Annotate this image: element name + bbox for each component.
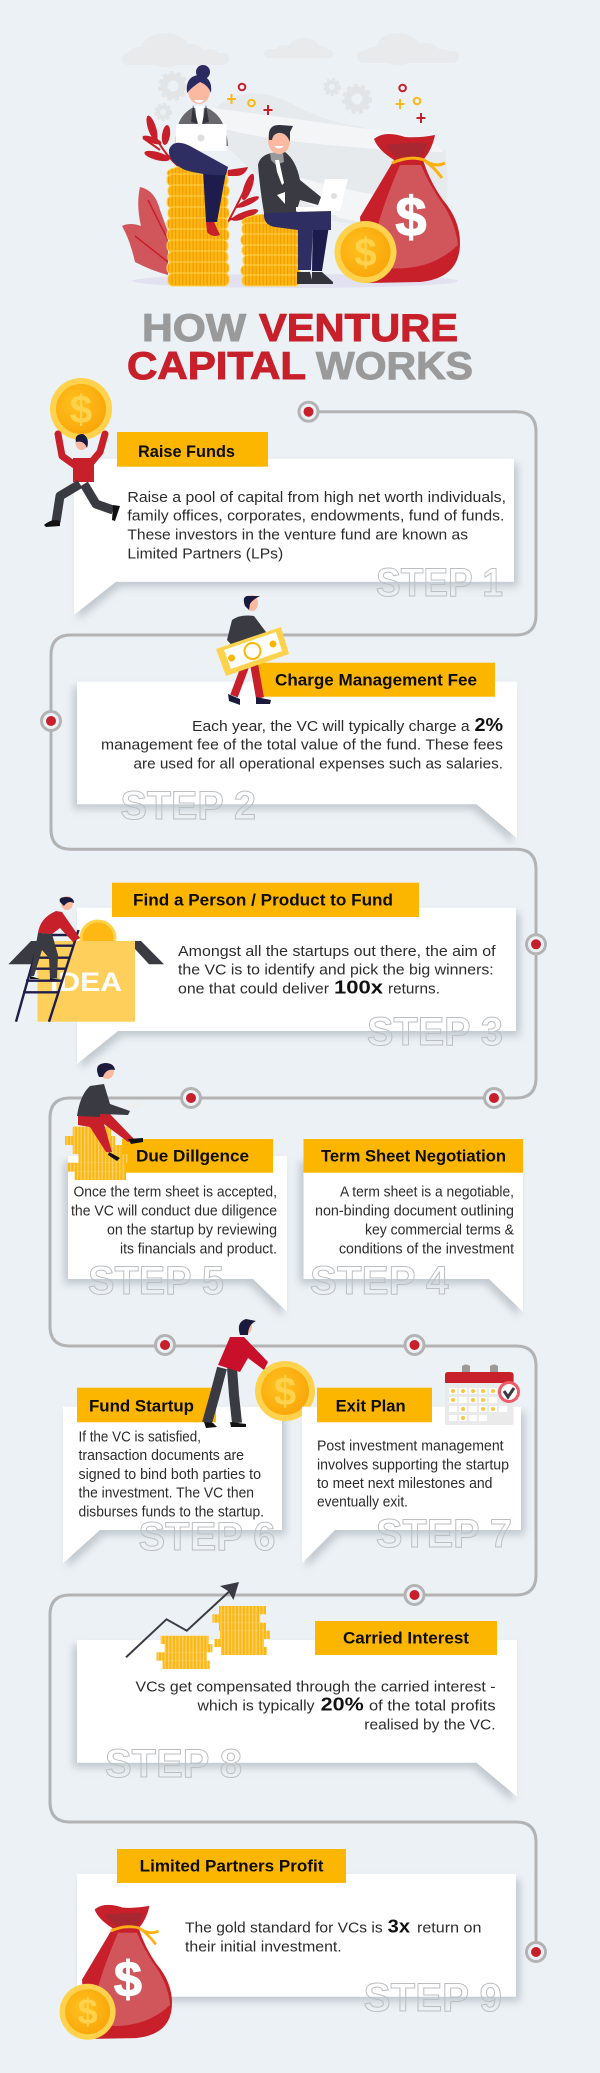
person lifting coin xyxy=(44,378,120,527)
body text: one that could deliver xyxy=(178,982,329,998)
ground shadow xyxy=(132,274,458,288)
body text: Once the term sheet is accepted, xyxy=(74,1185,277,1201)
body text: 100x xyxy=(334,978,383,998)
panel: step 1 xyxy=(44,378,514,615)
body text: their initial investment. xyxy=(185,1939,342,1955)
body text: the VC will conduct due diligence xyxy=(71,1204,277,1220)
node 7 xyxy=(405,1336,424,1354)
panel: step 7 xyxy=(302,1364,521,1563)
node 1 xyxy=(299,402,318,421)
body text: which is typically xyxy=(196,1698,315,1714)
body text xyxy=(127,490,506,563)
body text: Raise a pool of capital from high net worth individuals, xyxy=(127,490,506,506)
panel: step 3 xyxy=(8,883,516,1064)
background swoosh xyxy=(205,93,448,240)
heading: Carried Interest xyxy=(343,1628,469,1647)
speech box xyxy=(77,908,516,1064)
growth arrow xyxy=(126,1582,239,1657)
heading xyxy=(317,1388,432,1422)
node 5 xyxy=(182,1088,200,1108)
title: CAPITAL xyxy=(127,345,306,388)
title xyxy=(127,307,473,388)
step label: STEP 9 xyxy=(364,1976,502,2020)
heading: Charge Management Fee xyxy=(275,670,477,689)
node 2 xyxy=(42,712,60,730)
gears xyxy=(156,73,370,120)
clouds xyxy=(122,33,459,67)
body text: If the VC is satisfied, xyxy=(78,1429,201,1445)
body text xyxy=(185,1916,481,1955)
coin xyxy=(334,221,396,283)
panel: step 6 xyxy=(63,1319,315,1563)
person pushing coin xyxy=(204,1319,315,1428)
body text: VCs get compensated through the carried interest - xyxy=(136,1679,496,1695)
body text: key commercial terms & xyxy=(365,1223,514,1239)
coin: $ xyxy=(354,231,377,275)
step label: STEP 4 xyxy=(310,1259,449,1303)
heading xyxy=(315,1621,497,1655)
speech box xyxy=(77,1874,516,1997)
body text xyxy=(71,1185,277,1257)
heading: Exit Plan xyxy=(336,1397,406,1416)
body text xyxy=(315,1185,514,1257)
money bag: $ xyxy=(395,185,427,248)
icon: calendar xyxy=(445,1364,518,1425)
node 4 xyxy=(484,1088,504,1108)
step label: STEP 3 xyxy=(367,1010,503,1054)
icon: money bag with coin: $ xyxy=(114,1951,142,2008)
body text: family offices, corporates, endowments, fund of funds. xyxy=(127,509,504,525)
body text: conditions of the investment xyxy=(339,1241,514,1257)
body text: on the startup by reviewing xyxy=(107,1223,277,1239)
node 6 xyxy=(156,1336,174,1354)
body text: signed to bind both parties to xyxy=(78,1467,261,1483)
body text xyxy=(136,1679,496,1733)
body text: Amongst all the startups out there, the aim of xyxy=(178,944,497,960)
title: HOW xyxy=(142,307,246,350)
panel: step 9 xyxy=(60,1849,516,2040)
heading: Fund Startup xyxy=(89,1397,194,1416)
body text: 2% xyxy=(474,715,503,735)
person carrying banknote xyxy=(216,595,289,705)
money bag xyxy=(360,134,460,283)
speech box xyxy=(304,1156,523,1312)
step label: STEP 1 xyxy=(376,561,503,605)
icon: money bag with coin: $ xyxy=(78,1991,98,2032)
body text: Post investment management xyxy=(317,1438,504,1454)
body text: Limited Partners (LPs) xyxy=(127,547,283,563)
panel: step 5 xyxy=(65,1063,287,1312)
body text: involves supporting the startup xyxy=(317,1457,509,1473)
step label: STEP 2 xyxy=(120,784,256,828)
heading: Term Sheet Negotiation xyxy=(321,1147,506,1166)
heading xyxy=(112,883,419,917)
body text: A term sheet is a negotiable, xyxy=(340,1185,514,1201)
body text xyxy=(78,1429,264,1521)
speech box xyxy=(77,682,517,838)
speech box xyxy=(74,459,514,615)
body text: 20% xyxy=(321,1694,364,1714)
coin stack left xyxy=(167,165,229,286)
heading: Limited Partners Profit xyxy=(140,1857,324,1876)
body text xyxy=(101,715,503,772)
person pushing coin: $ xyxy=(274,1370,296,1414)
body text: These investors in the venture fund are known as xyxy=(127,528,468,544)
node 3 xyxy=(526,935,546,954)
idea box with ladder: IDEA xyxy=(50,967,122,997)
coin stack right xyxy=(241,214,300,286)
coin stacks xyxy=(156,1606,270,1669)
heading: Raise Funds xyxy=(138,442,235,461)
body text xyxy=(178,944,497,998)
body text: returns. xyxy=(388,982,440,998)
speech box xyxy=(77,1640,517,1797)
body text: of the total profits xyxy=(369,1698,496,1714)
body text: to meet next milestones and xyxy=(317,1476,492,1492)
sparkles xyxy=(227,84,426,123)
woman xyxy=(169,65,248,236)
step label: STEP 8 xyxy=(105,1742,242,1786)
body text: realised by the VC. xyxy=(364,1717,496,1733)
speech box xyxy=(68,1156,287,1312)
body text: Each year, the VC will typically charge a xyxy=(192,719,471,735)
body text: are used for all operational expenses such as salaries. xyxy=(134,756,503,772)
panel: step 2 xyxy=(77,595,517,838)
heading: Due Dillgence xyxy=(136,1147,249,1166)
heading xyxy=(77,1388,216,1422)
step label: STEP 5 xyxy=(88,1259,224,1303)
icon: money bag with coin xyxy=(60,1905,172,2040)
heading xyxy=(122,1139,273,1173)
step label: STEP 6 xyxy=(138,1515,276,1559)
heading xyxy=(117,1849,346,1883)
node 8 xyxy=(405,1586,424,1604)
man xyxy=(258,125,348,284)
person sitting on coins xyxy=(65,1063,143,1180)
body text: management fee of the total value of the fund. These fees xyxy=(101,738,503,754)
plants xyxy=(122,114,260,275)
speech box xyxy=(302,1407,521,1563)
heading: Find a Person / Product to Fund xyxy=(133,890,393,909)
idea box with ladder xyxy=(8,896,164,1022)
speech box xyxy=(63,1407,282,1563)
body text: eventually exit. xyxy=(317,1495,408,1511)
connector path xyxy=(50,412,536,1952)
body text: non-binding document outlining xyxy=(315,1204,514,1220)
hero illustration xyxy=(122,33,460,288)
node 9 xyxy=(526,1942,546,1962)
panel: step 4 xyxy=(304,1139,523,1312)
step label: STEP 7 xyxy=(376,1512,512,1556)
heading xyxy=(117,432,268,467)
body text: return on xyxy=(417,1920,481,1936)
body text: the investment. The VC then xyxy=(78,1486,254,1502)
heading xyxy=(304,1139,523,1173)
person lifting coin: $ xyxy=(70,388,92,432)
body text: 3x xyxy=(388,1916,410,1936)
title: VENTURE xyxy=(259,307,458,350)
body text xyxy=(317,1438,509,1511)
body text: transaction documents are xyxy=(78,1448,244,1464)
body text: The gold standard for VCs is xyxy=(185,1920,383,1936)
heading xyxy=(258,663,495,697)
title: WORKS xyxy=(316,345,473,388)
body text: the VC is to identify and pick the big winners: xyxy=(178,963,494,979)
panel: step 8 xyxy=(77,1582,517,1797)
body text: its financials and product. xyxy=(120,1241,277,1257)
body text: disburses funds to the startup. xyxy=(78,1505,264,1521)
